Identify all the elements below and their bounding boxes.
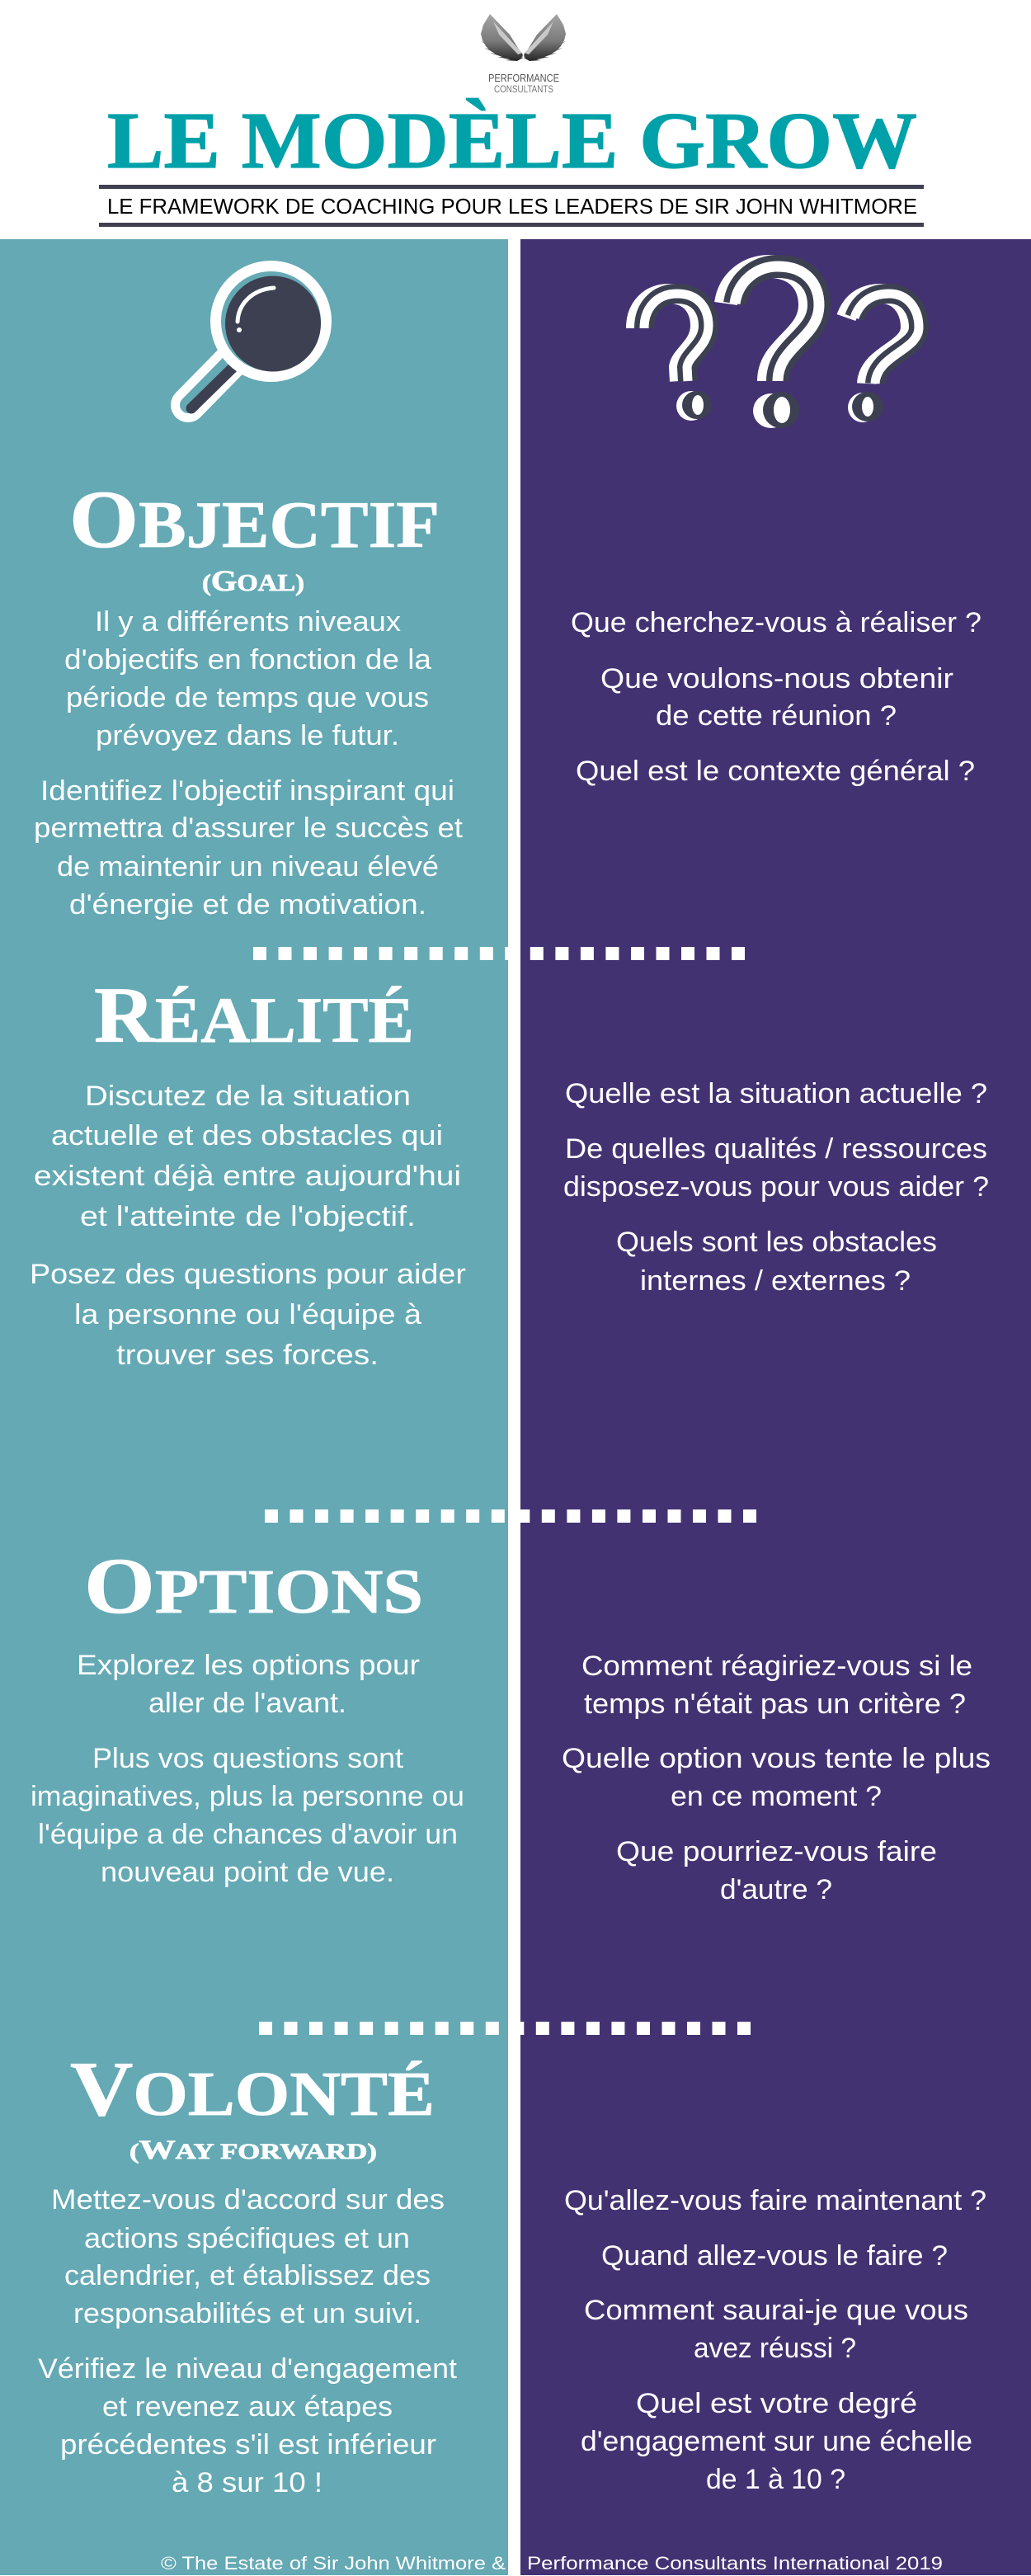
text block: options questions: Que pourriez-vous faire	[616, 1836, 937, 1867]
text block: objectif explanation: permettra d'assurer le succès et	[34, 812, 464, 844]
text block: options explanation: nouveau point de vue.	[101, 1857, 394, 1888]
text block: réalité questions: disposez-vous pour vous aider ?	[563, 1171, 989, 1203]
text block: options questions: d'autre ?	[720, 1874, 832, 1905]
footer: copyright: Performance Consultants International 2019	[527, 2553, 943, 2574]
text block: réalité explanation: Discutez de la situation	[85, 1081, 411, 1112]
text block: objectif explanation: Il y a différents niveaux	[95, 606, 401, 638]
text block: volonté questions: Comment saurai-je que vous	[584, 2295, 968, 2326]
text block: réalité questions	[563, 1078, 989, 1297]
text block: volonté questions: avez réussi ?	[694, 2333, 856, 2364]
subheading: Goal: (GOAL)	[202, 564, 304, 597]
text block: réalité explanation: trouver ses forces.	[116, 1340, 379, 1371]
text block: réalité explanation	[30, 1081, 466, 1371]
text block: options questions	[562, 1651, 991, 1905]
question mark right	[846, 294, 919, 422]
text block: options explanation: l'équipe a de chances d'avoir un	[38, 1819, 458, 1850]
panel: left explanations background	[0, 239, 508, 2575]
text block: réalité explanation: et l'atteinte de l'objectif.	[80, 1201, 416, 1232]
text block: options explanation	[31, 1650, 464, 1888]
text block: objectif questions	[571, 607, 982, 787]
question mark left	[636, 294, 712, 421]
text block: options explanation: Explorez les options pour	[77, 1650, 420, 1681]
subtitle with rules	[99, 185, 924, 227]
heading: Réalité: RÉALITÉ	[94, 971, 414, 1059]
text block: volonté explanation: Vérifiez le niveau d'engagement	[38, 2353, 458, 2385]
text block: objectif explanation: de maintenir un niveau élevé	[57, 851, 439, 883]
subheading: Way forward: (W AY FORWARD)	[129, 2136, 377, 2165]
icon: three question marks	[636, 266, 919, 428]
text block: objectif explanation: Identifiez l'objectif inspirant qui	[40, 775, 454, 807]
text block: volonté explanation: à 8 sur 10 !	[172, 2467, 322, 2498]
text block: réalité explanation: Posez des questions pour aider	[30, 1259, 466, 1290]
text block: objectif questions: Que cherchez-vous à réaliser ?	[571, 607, 982, 638]
dotted divider 1	[253, 947, 745, 960]
text block: options questions: en ce moment ?	[671, 1781, 882, 1812]
text block: options questions: Comment réagiriez-vous si le	[581, 1651, 972, 1682]
text block: volonté questions: Quand allez-vous le faire ?	[601, 2240, 948, 2272]
text block: volonté questions: de 1 à 10 ?	[706, 2464, 845, 2495]
text block: options explanation: aller de l'avant.	[148, 1688, 346, 1719]
text block: réalité questions: internes / externes ?	[640, 1265, 911, 1297]
footer: copyright: © The Estate of Sir John Whitmore &	[161, 2553, 506, 2574]
text block: volonté questions	[564, 2185, 986, 2495]
text block: volonté questions: d'engagement sur une échelle	[581, 2426, 972, 2457]
text block: réalité questions: Quelle est la situation actuelle ?	[565, 1078, 987, 1109]
heading: Objectif: OBJECTIF	[69, 473, 440, 565]
text block: volonté explanation: actions spécifiques et un	[84, 2223, 410, 2254]
question mark middle	[726, 266, 819, 428]
text block: objectif explanation	[34, 606, 464, 921]
text block: options questions: temps n'était pas un critère ?	[584, 1688, 966, 1720]
text block: objectif questions: Quel est le contexte général ?	[576, 756, 975, 787]
text block: volonté explanation	[38, 2184, 458, 2498]
text block: réalité explanation: existent déjà entre aujourd'hui	[34, 1161, 461, 1192]
dotted divider 3	[259, 2022, 751, 2035]
text block: volonté explanation: responsabilités et un suivi.	[73, 2298, 421, 2329]
text block: objectif explanation: prévoyez dans le futur.	[96, 720, 399, 751]
heading: Volonté: VOLONTÉ	[70, 2046, 435, 2132]
panel: right questions background	[520, 239, 1031, 2575]
logo text: PERFORMANCE	[488, 72, 559, 84]
text block: objectif explanation: d'énergie et de motivation.	[69, 889, 426, 921]
text block: volonté questions: Qu'allez-vous faire maintenant ?	[564, 2185, 986, 2216]
text block: volonté questions: Quel est votre degré	[636, 2388, 917, 2419]
icon: wings	[480, 14, 567, 61]
text block: réalité questions: Quels sont les obstacles	[616, 1227, 937, 1258]
text block: options explanation: imaginatives, plus la personne ou	[31, 1781, 464, 1812]
text block: réalité explanation: actuelle et des obstacles qui	[51, 1120, 443, 1151]
text block: réalité explanation: la personne ou l'équipe à	[74, 1299, 421, 1330]
text block: objectif questions: Que voulons-nous obtenir	[600, 663, 953, 695]
text block: options questions: Quelle option vous tente le plus	[562, 1743, 991, 1774]
text block: volonté explanation: Mettez-vous d'accord sur des	[51, 2184, 445, 2216]
text block: volonté explanation: et revenez aux étapes	[102, 2391, 393, 2423]
logo text: CONSULTANTS	[494, 83, 553, 95]
dotted divider 2	[265, 1509, 756, 1523]
text block: réalité questions: De quelles qualités / ressources	[565, 1133, 987, 1165]
text block: volonté explanation: calendrier, et établissez des	[64, 2260, 431, 2291]
text block: objectif explanation: d'objectifs en fonction de la	[64, 644, 431, 676]
title: LE MODÈLE GROW	[107, 97, 917, 186]
icon: magnifying glass	[188, 266, 327, 408]
heading: Options: OPTIONS	[84, 1542, 423, 1630]
text block: objectif explanation: période de temps que vous	[66, 682, 429, 713]
logo text	[488, 72, 559, 95]
text block: objectif questions: de cette réunion ?	[656, 700, 897, 732]
text block: options explanation: Plus vos questions sont	[92, 1743, 404, 1774]
text block: volonté explanation: précédentes s'il est inférieur	[60, 2429, 436, 2461]
subtitle with rules: LE FRAMEWORK DE COACHING POUR LES LEADERS DE SIR JOHN WHITMORE	[107, 194, 917, 219]
logo: Performance Consultants	[480, 14, 567, 95]
footer: copyright	[161, 2553, 943, 2574]
